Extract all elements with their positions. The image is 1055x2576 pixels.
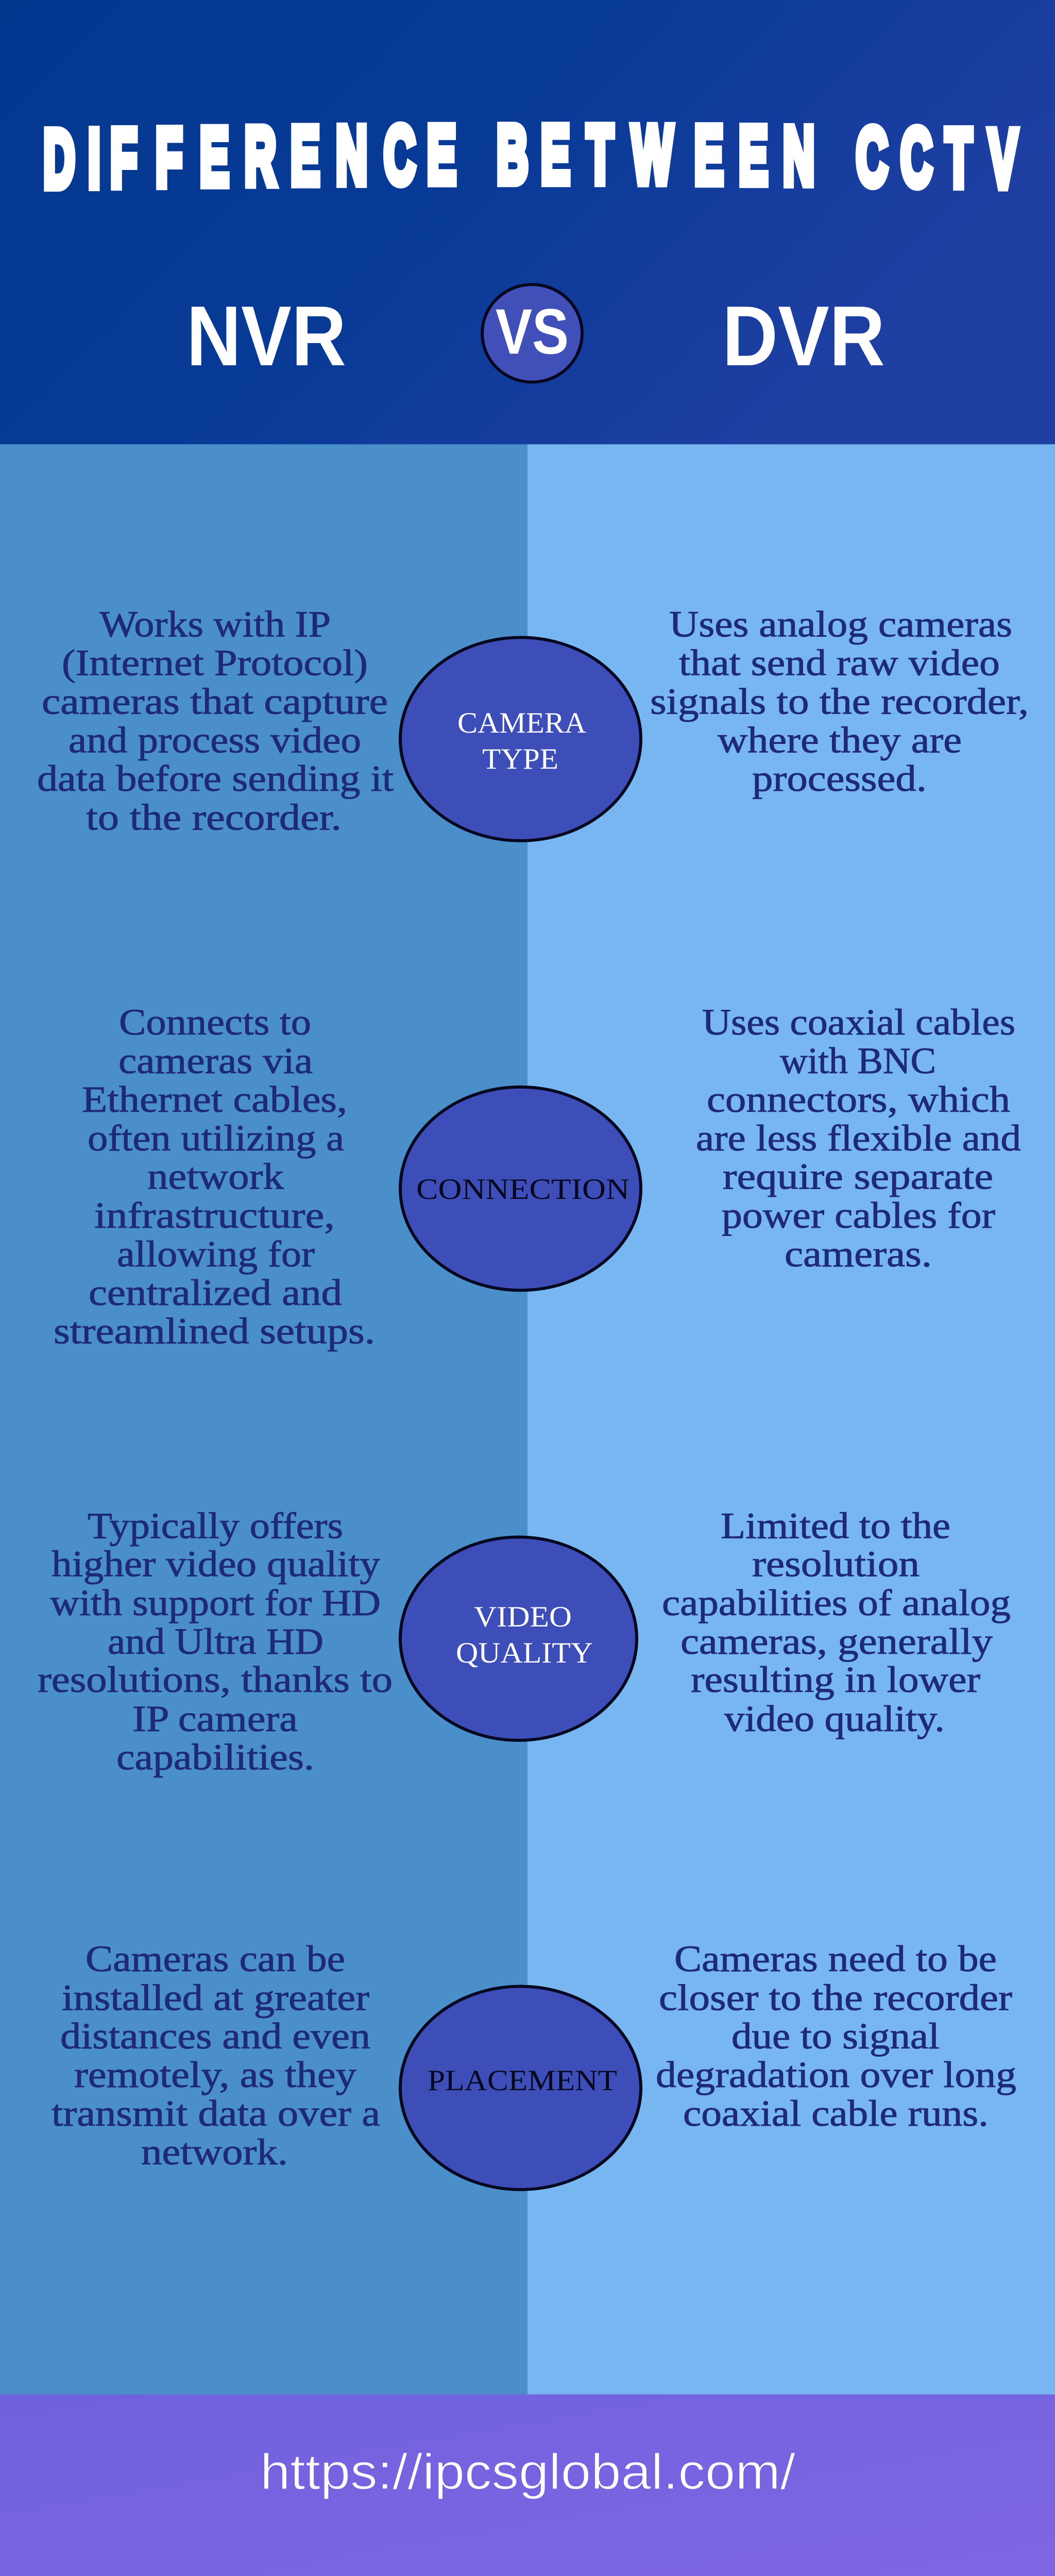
text block: DVR placement: coaxial cable runs. — [683, 2093, 989, 2134]
footer url: https://ipcsglobal.com/ — [260, 2444, 796, 2500]
text block: DVR connection — [696, 1002, 1021, 1275]
icon: VS badge: VS — [496, 296, 569, 367]
badge: camera type: TYPE — [482, 743, 558, 775]
text block: NVR camera type: to the recorder. — [86, 796, 342, 838]
text block: DVR connection: Uses coaxial cables — [702, 1002, 1015, 1043]
text block: DVR placement: degradation over long — [656, 2054, 1016, 2095]
text block: NVR placement — [52, 1938, 380, 2173]
text block: NVR connection: Connects to — [119, 1002, 311, 1043]
text block: NVR video quality: capabilities. — [116, 1736, 314, 1777]
text block: NVR connection: infrastructure, — [94, 1195, 335, 1236]
panel: right DVR column background — [528, 444, 1055, 2395]
text block: NVR connection: network — [147, 1156, 284, 1197]
text block: NVR camera type: and process video — [69, 719, 361, 760]
row: camera type — [37, 603, 1029, 841]
text block: DVR placement: closer to the recorder — [659, 1977, 1012, 2018]
text block: DVR connection: power cables for — [722, 1195, 995, 1236]
text block: NVR camera type: cameras that capture — [42, 681, 388, 722]
text block: DVR camera type: that send raw video — [679, 642, 1000, 683]
text block: DVR camera type: processed. — [752, 758, 927, 799]
text block: DVR camera type: signals to the recorder, — [650, 681, 1029, 722]
text block: DVR video quality: Limited to the — [721, 1505, 950, 1546]
text block: NVR video quality: with support for HD — [50, 1582, 381, 1623]
text block: DVR video quality: resolution — [752, 1543, 920, 1584]
text block: DVR placement: Cameras need to be — [674, 1938, 997, 1979]
text block: NVR video quality: and Ultra HD — [108, 1621, 324, 1662]
text block: NVR connection: centralized and — [89, 1272, 342, 1313]
text block: DVR video quality: resulting in lower — [691, 1659, 980, 1700]
text block: DVR connection: cameras. — [785, 1233, 932, 1275]
text block: NVR placement: transmit data over a — [52, 2093, 380, 2134]
row: video quality — [38, 1505, 1011, 1777]
badge: connection: CONNECTION — [416, 1174, 629, 1206]
text block: NVR camera type — [37, 603, 394, 838]
title: DIFFERENCE BETWEEN CCTV — [43, 109, 1017, 205]
text block: NVR connection — [54, 1002, 375, 1351]
text block: DVR video quality: video quality. — [724, 1698, 945, 1739]
footer panel — [0, 2394, 1055, 2576]
text block: NVR camera type: data before sending it — [37, 758, 394, 799]
header panel — [0, 0, 1055, 444]
row: connection — [54, 1002, 1021, 1351]
text block: NVR video quality: Typically offers — [88, 1505, 343, 1546]
text block: DVR video quality: cameras, generally — [680, 1621, 993, 1662]
text block: DVR camera type: Uses analog cameras — [669, 603, 1012, 645]
text block: DVR connection: require separate — [723, 1156, 993, 1197]
text block: NVR connection: streamlined setups. — [54, 1310, 375, 1351]
text block: NVR video quality — [38, 1505, 393, 1777]
text block: NVR video quality: resolutions, thanks to — [38, 1659, 393, 1700]
text block: NVR connection: cameras via — [118, 1040, 313, 1081]
badge: camera type: CAMERA — [457, 707, 586, 739]
icon: VS badge — [482, 284, 582, 382]
text block: NVR placement: installed at greater — [62, 1977, 369, 2018]
text block: NVR video quality: higher video quality — [52, 1543, 380, 1584]
badge: placement: PLACEMENT — [428, 2065, 617, 2097]
text block: NVR camera type: Works with IP — [99, 603, 331, 645]
text block: DVR video quality: capabilities of analog — [662, 1582, 1011, 1623]
text block: DVR camera type: where they are — [718, 719, 962, 760]
text block: DVR connection: with BNC — [780, 1040, 936, 1081]
text block: NVR connection: allowing for — [117, 1233, 315, 1275]
badge: placement — [400, 1986, 641, 2190]
text block: NVR placement: distances and even — [60, 2015, 370, 2057]
text block: DVR placement: due to signal — [731, 2015, 940, 2057]
text block: NVR connection: Ethernet cables, — [82, 1079, 347, 1120]
text block: NVR video quality: IP camera — [132, 1698, 298, 1739]
badge: video quality: QUALITY — [456, 1637, 593, 1669]
text block: DVR placement — [656, 1938, 1016, 2134]
text block: NVR placement: network. — [141, 2131, 288, 2173]
badge: video quality: VIDEO — [474, 1601, 572, 1633]
text block: DVR camera type — [650, 603, 1029, 799]
heading: DVR: DVR — [722, 289, 885, 384]
text block: NVR camera type: (Internet Protocol) — [62, 642, 368, 683]
panel: left NVR column background — [0, 444, 528, 2395]
badge: connection — [400, 1087, 641, 1290]
row: placement — [52, 1938, 1016, 2190]
text block: DVR video quality — [662, 1505, 1011, 1739]
badge: video quality — [400, 1537, 637, 1740]
text block: DVR connection: connectors, which — [707, 1079, 1010, 1120]
text block: NVR placement: Cameras can be — [86, 1938, 345, 1979]
heading: NVR: NVR — [186, 289, 346, 384]
badge: camera type — [400, 637, 641, 841]
text block: NVR connection: often utilizing a — [88, 1117, 344, 1159]
text block: DVR connection: are less flexible and — [696, 1117, 1021, 1159]
text block: NVR placement: remotely, as they — [74, 2054, 356, 2095]
